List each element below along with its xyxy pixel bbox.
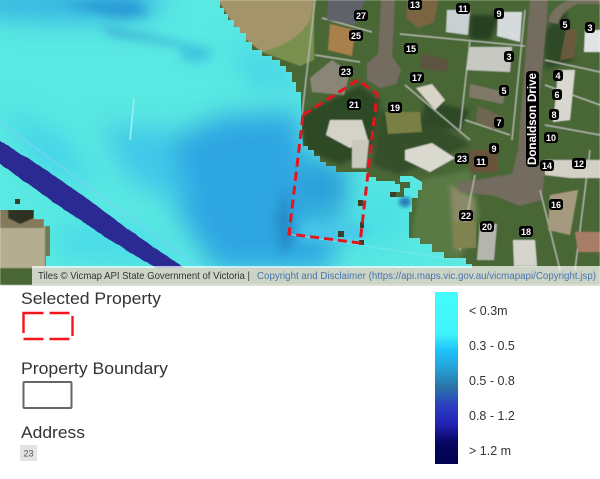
address labels: 18 [521,227,531,237]
address labels: 23 [341,67,351,77]
selected property outline [289,80,377,243]
depth labels: > 1.2 m [469,444,511,458]
attribution bar [32,266,600,285]
depth labels: < 0.3m [469,304,508,318]
depth colour ramp [435,292,458,464]
sports court [0,210,52,268]
address labels: 6 [554,90,560,100]
address labels: 23 [457,154,467,164]
address labels: 5 [562,20,568,30]
address labels: 7 [496,118,502,128]
houses [310,0,600,266]
address labels: 25 [351,31,361,41]
address labels: 10 [546,133,556,143]
address labels: 9 [491,144,497,154]
roads [367,0,600,206]
address labels: 9 [496,9,502,19]
attribution bar: Tiles © Vicmap API State Government of Victoria | [38,270,250,282]
flood cut-outs [15,192,396,245]
address labels: 13 [410,0,420,10]
channel [0,140,184,268]
address labels: 3 [506,52,512,62]
address labels: 19 [390,103,400,113]
flood overlay [0,0,480,278]
legend: address: Address [21,423,85,442]
property lines [302,0,600,270]
legend: property boundary: Property Boundary [21,359,169,378]
address labels: 8 [551,110,557,120]
address labels: 12 [574,159,584,169]
address labels: 5 [501,86,507,96]
address labels: 14 [542,161,552,171]
small deep pool [399,197,411,207]
legend: selected property: Selected Property [21,289,162,308]
address labels [339,0,595,237]
address labels: 11 [458,4,468,14]
address labels: 20 [482,222,492,232]
address labels: 15 [406,44,416,54]
legend: address: 23 [23,448,34,458]
depth labels: 0.5 - 0.8 [469,374,515,388]
legend: selected property [21,289,162,339]
depth labels [469,304,515,458]
paddock [218,0,314,52]
deeper water zones [0,0,405,270]
address labels: 21 [349,100,359,110]
address labels: 17 [412,73,422,83]
map [0,0,600,285]
address labels: 4 [555,71,561,81]
street name: Donaldson Drive [527,73,539,165]
address labels: 3 [587,23,593,33]
address labels: 16 [551,200,561,210]
legend: property boundary [21,359,169,408]
address labels: 27 [356,11,366,21]
light lines [0,122,200,268]
address labels: 11 [476,157,486,167]
legend: address [20,423,85,461]
depth labels: 0.3 - 0.5 [469,339,515,353]
tree patches [300,10,575,260]
address labels: 22 [461,211,471,221]
satellite base [0,0,600,285]
depth labels: 0.8 - 1.2 [469,409,515,423]
